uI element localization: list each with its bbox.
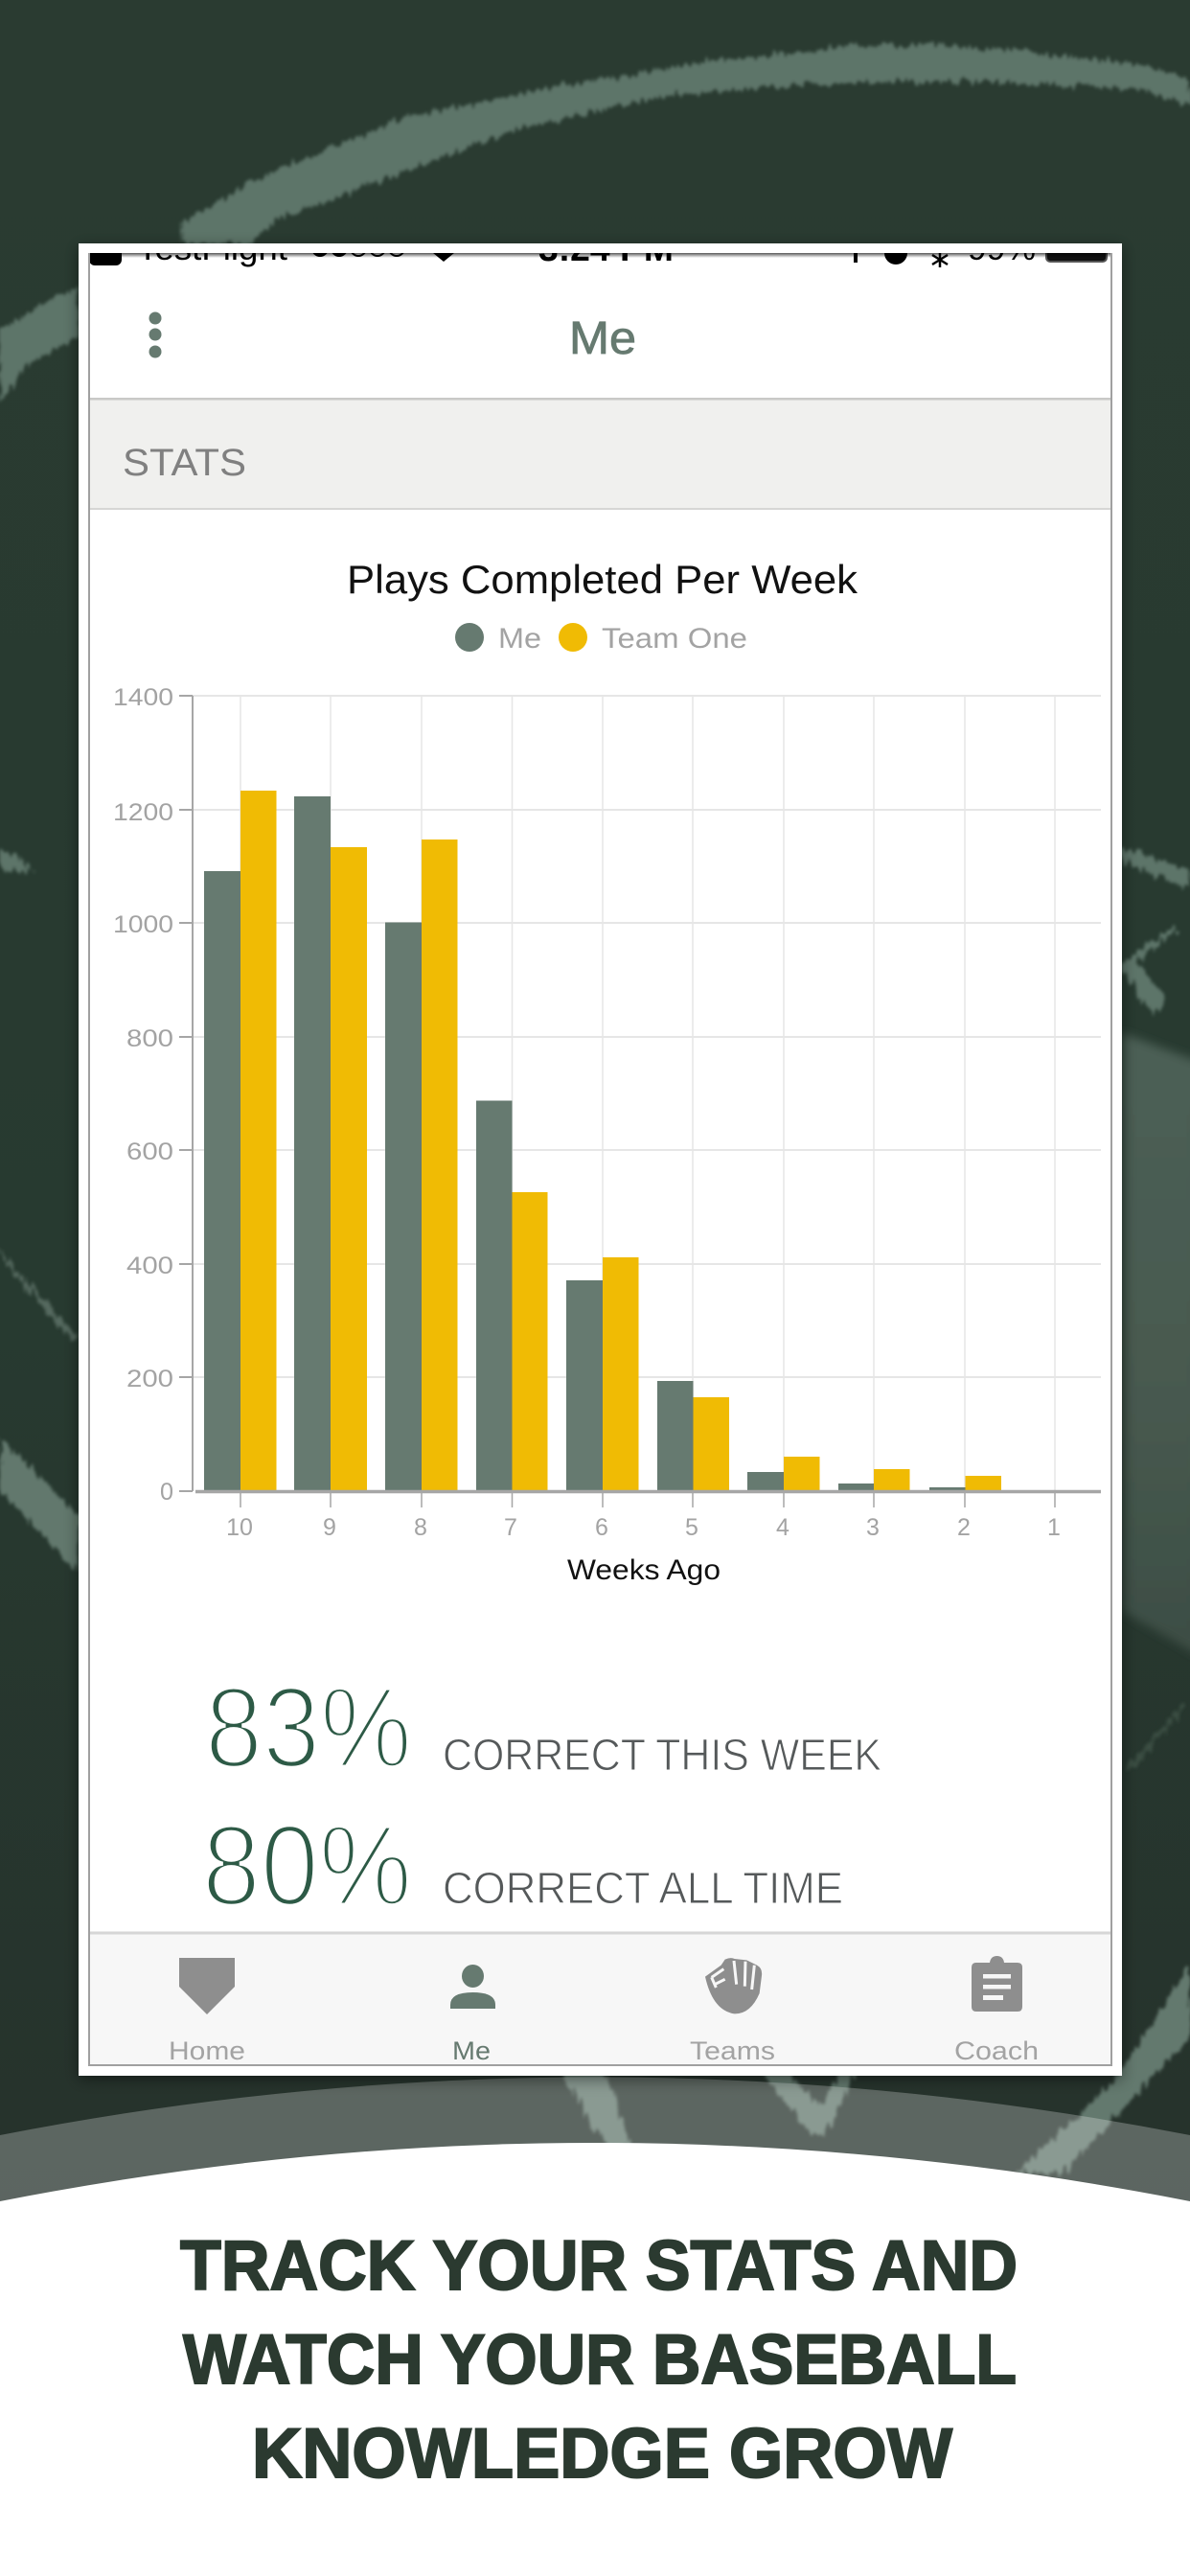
y axis labels (113, 684, 173, 1506)
y axis labels: 400 (126, 1253, 173, 1279)
chart title: Plays Completed Per Week (347, 557, 858, 602)
grid lines (193, 696, 1101, 1491)
y axis labels: 600 (126, 1138, 173, 1165)
tab labels (169, 2036, 1039, 2065)
x axis labels: 7 (504, 1514, 517, 1541)
y axis labels: 1400 (113, 684, 173, 711)
y axis labels: 800 (126, 1025, 173, 1052)
y axis labels: 1200 (113, 799, 173, 826)
icon: clipboard (972, 1956, 1022, 2012)
x axis labels: 1 (1047, 1514, 1061, 1541)
chalk: large arc (0, 45, 1190, 402)
chalk: left strokes (0, 852, 79, 1574)
chalk: right ball and marks (1017, 847, 1190, 2173)
legend: Team One (602, 623, 747, 655)
tab labels: Coach (954, 2036, 1039, 2065)
status bar (cropped): TestFlight (137, 228, 287, 267)
headline caption: WATCH YOUR BASEBALL (183, 2321, 1017, 2399)
tab labels: Me (452, 2036, 491, 2065)
status bar (cropped): 3:24 PM (538, 229, 674, 269)
legend: Me (498, 623, 541, 655)
stats section header: STATS (123, 442, 246, 484)
legend (455, 623, 747, 655)
curved translucent band (0, 2078, 1190, 2576)
screenshot inner border (89, 253, 1111, 2065)
x axis labels: 6 (595, 1514, 608, 1541)
x axis title: Weeks Ago (567, 1554, 721, 1586)
screenshot white frame (79, 243, 1122, 2076)
tab labels: Teams (690, 2036, 775, 2065)
bars: Me (204, 796, 966, 1491)
icon: baseball glove (705, 1958, 762, 2013)
stat: correct this week: 83% (205, 1664, 412, 1792)
y axis labels: 200 (126, 1366, 173, 1392)
status bar (cropped) (90, 253, 1108, 267)
x axis labels: 10 (226, 1514, 253, 1541)
bar chart: plays completed per week (113, 557, 1101, 1586)
tab bar (89, 1932, 1111, 2065)
stat: correct all time (202, 1802, 843, 1930)
stat: correct this week: CORRECT THIS WEEK (443, 1730, 881, 1780)
x axis labels: 5 (685, 1514, 698, 1541)
icon: person (450, 1965, 495, 2009)
headline caption: TRACK YOUR STATS AND (180, 2227, 1018, 2305)
x axis labels (226, 1514, 1061, 1541)
x axis labels: 8 (414, 1514, 427, 1541)
stat: correct all time: 80% (202, 1802, 412, 1930)
chalk: marks behind bottom band (554, 2060, 862, 2147)
bars: Team One (240, 791, 1001, 1491)
nav bar (89, 253, 1111, 399)
headline caption: KNOWLEDGE GROW (252, 2415, 952, 2493)
phone screenshot panel (79, 228, 1122, 2076)
icon: overflow menu dots (149, 312, 161, 358)
stats section header (89, 398, 1111, 510)
x axis labels: 2 (957, 1514, 971, 1541)
icon: home plate (179, 1958, 235, 2014)
stat: correct this week (205, 1664, 881, 1792)
x axis labels: 3 (866, 1514, 880, 1541)
tab labels: Home (169, 2036, 245, 2065)
axes and ticks (179, 696, 1101, 1507)
x axis labels: 9 (323, 1514, 336, 1541)
headline caption (180, 2227, 1018, 2493)
x axis labels: 4 (776, 1514, 790, 1541)
stat: correct all time: CORRECT ALL TIME (443, 1863, 843, 1913)
y axis labels: 1000 (113, 911, 173, 938)
nav title: Me (569, 313, 636, 364)
status bar (cropped): 99% (968, 228, 1036, 267)
white caption area (0, 2143, 1190, 2576)
y axis labels: 0 (160, 1479, 173, 1506)
